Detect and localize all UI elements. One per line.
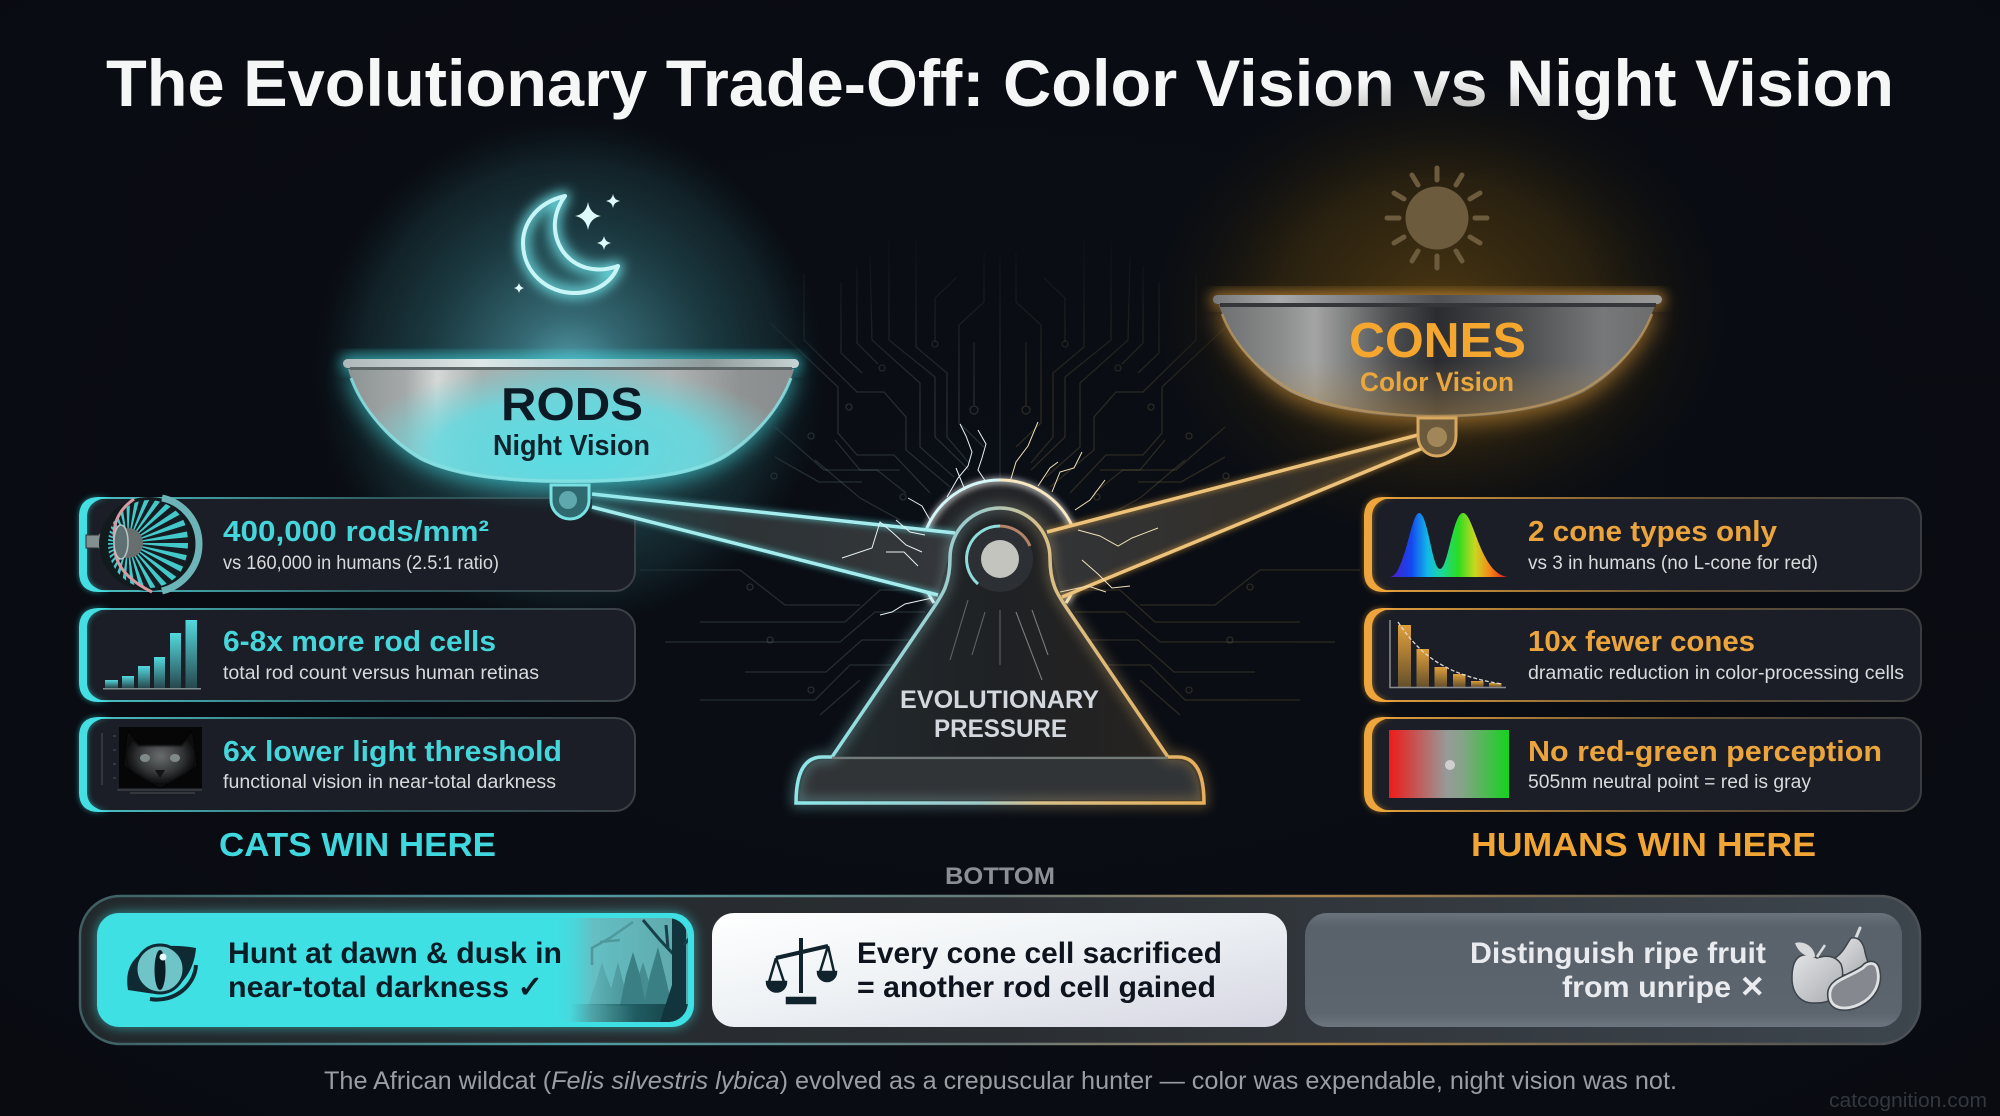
fulcrum: pedestal (796, 508, 1204, 803)
detail: color processing: dramatic reduction in color-processing cells (1528, 663, 1904, 684)
icon: sun (1387, 168, 1487, 268)
panel: human advantages (1364, 497, 1921, 863)
glow: sun halo (1147, 75, 1727, 545)
label: EVOLUTIONARY PRESSURE: PRESSURE (934, 715, 1067, 743)
text: trade-off rule: Every cone cell sacrificed (857, 937, 1222, 970)
caption: CATS WIN HERE: CATS WIN HERE (219, 826, 496, 863)
card: light threshold (79, 717, 635, 812)
label: BOTTOM: BOTTOM (945, 863, 1055, 890)
scene: dark forest (570, 918, 688, 1022)
text: trade-off rule: = another rod cell gained (857, 971, 1216, 1004)
text: trade-off rule (857, 937, 1222, 1004)
text: hunt at dawn: near-total darkness ✓ (228, 971, 543, 1004)
icon: red-green gradient (1389, 730, 1509, 798)
text: hunt at dawn (228, 937, 562, 1004)
title: The Evolutionary Trade-Off: Color Vision vs Night Vision (106, 46, 1894, 120)
pivot: concentric hub (967, 526, 1033, 592)
bowl: rods night vision (340, 354, 802, 519)
text: distinguish ripe fruit: Distinguish ripe fruit (1470, 937, 1766, 970)
card: more rod cells (79, 608, 635, 702)
icon: cat eye (127, 945, 196, 1000)
subheading: Night Vision: Night Vision (493, 430, 650, 462)
icon: apple and pear (1792, 928, 1878, 1008)
card: fewer cones (1364, 608, 1921, 702)
detail: rod count: total rod count versus human retinas (223, 663, 539, 684)
text: distinguish ripe fruit (1470, 937, 1766, 1004)
icon: retina cross-section (86, 495, 199, 593)
detail: darkness: functional vision in near-total darkness (223, 772, 556, 793)
card: cone types (1364, 497, 1921, 592)
icon: balance scales (767, 938, 836, 1003)
knob: right pan hinge (1418, 418, 1456, 456)
card: the trade-off (712, 913, 1287, 1027)
detail: ratio: vs 160,000 in humans (2.5:1 ratio) (223, 553, 499, 574)
heading: CONES: CONES (1349, 314, 1526, 368)
panel: bottom line outcomes (80, 896, 1920, 1044)
footnote: The African wildcat (Felis silvestris lybica) evolved as a crepuscular hunter — color was expendable, night vision was not. (324, 1067, 1677, 1095)
beam: right arm (1047, 435, 1423, 597)
icon: declining bar chart (1390, 620, 1506, 688)
bowl: cones color vision (1210, 291, 1666, 456)
glow: night dome (315, 117, 825, 627)
stat: more rods: 6-8x more rod cells (223, 626, 496, 658)
text: distinguish ripe fruit: from unripe ✕ (1562, 971, 1765, 1004)
knob: left pan hinge (551, 485, 589, 519)
icon: dual-peak spectrum (1390, 513, 1508, 577)
caption: HUMANS WIN HERE: HUMANS WIN HERE (1471, 826, 1816, 863)
card: humans distinguish fruit (1305, 913, 1902, 1027)
panel: cat advantages (79, 495, 635, 863)
stat: light threshold: 6x lower light threshold (223, 736, 562, 768)
subheading: Color Vision: Color Vision (1360, 367, 1514, 397)
icon: cat in darkness chart (102, 727, 202, 793)
detail: no L-cone: vs 3 in humans (no L-cone for red) (1528, 553, 1818, 574)
detail: neutral point: 505nm neutral point = red is gray (1528, 772, 1811, 793)
card: 400,000 rods/mm2 (79, 495, 635, 593)
text: hunt at dawn: Hunt at dawn & dusk in (228, 937, 562, 970)
sparks around pivot (842, 422, 1158, 615)
watermark: catcognition.com (1829, 1090, 1987, 1112)
stat: rods per mm: 400,000 rods/mm² (223, 516, 489, 548)
beam: left arm (592, 494, 955, 595)
fulcrum: energy ring (921, 480, 1079, 638)
stat: red-green: No red-green perception (1528, 736, 1882, 768)
stat: fewer cones: 10x fewer cones (1528, 626, 1755, 658)
icon: crescent moon and stars (514, 194, 620, 293)
stat: cone types: 2 cone types only (1528, 516, 1777, 548)
heading: RODS: RODS (501, 378, 643, 430)
icon: rising bar chart (103, 620, 201, 690)
card: cats hunt at dawn and dusk (97, 913, 694, 1027)
card: red-green perception (1364, 717, 1921, 812)
label: EVOLUTIONARY PRESSURE (900, 686, 1099, 743)
circuit pattern behind scale (640, 233, 1360, 715)
label: EVOLUTIONARY PRESSURE: EVOLUTIONARY (900, 686, 1099, 714)
